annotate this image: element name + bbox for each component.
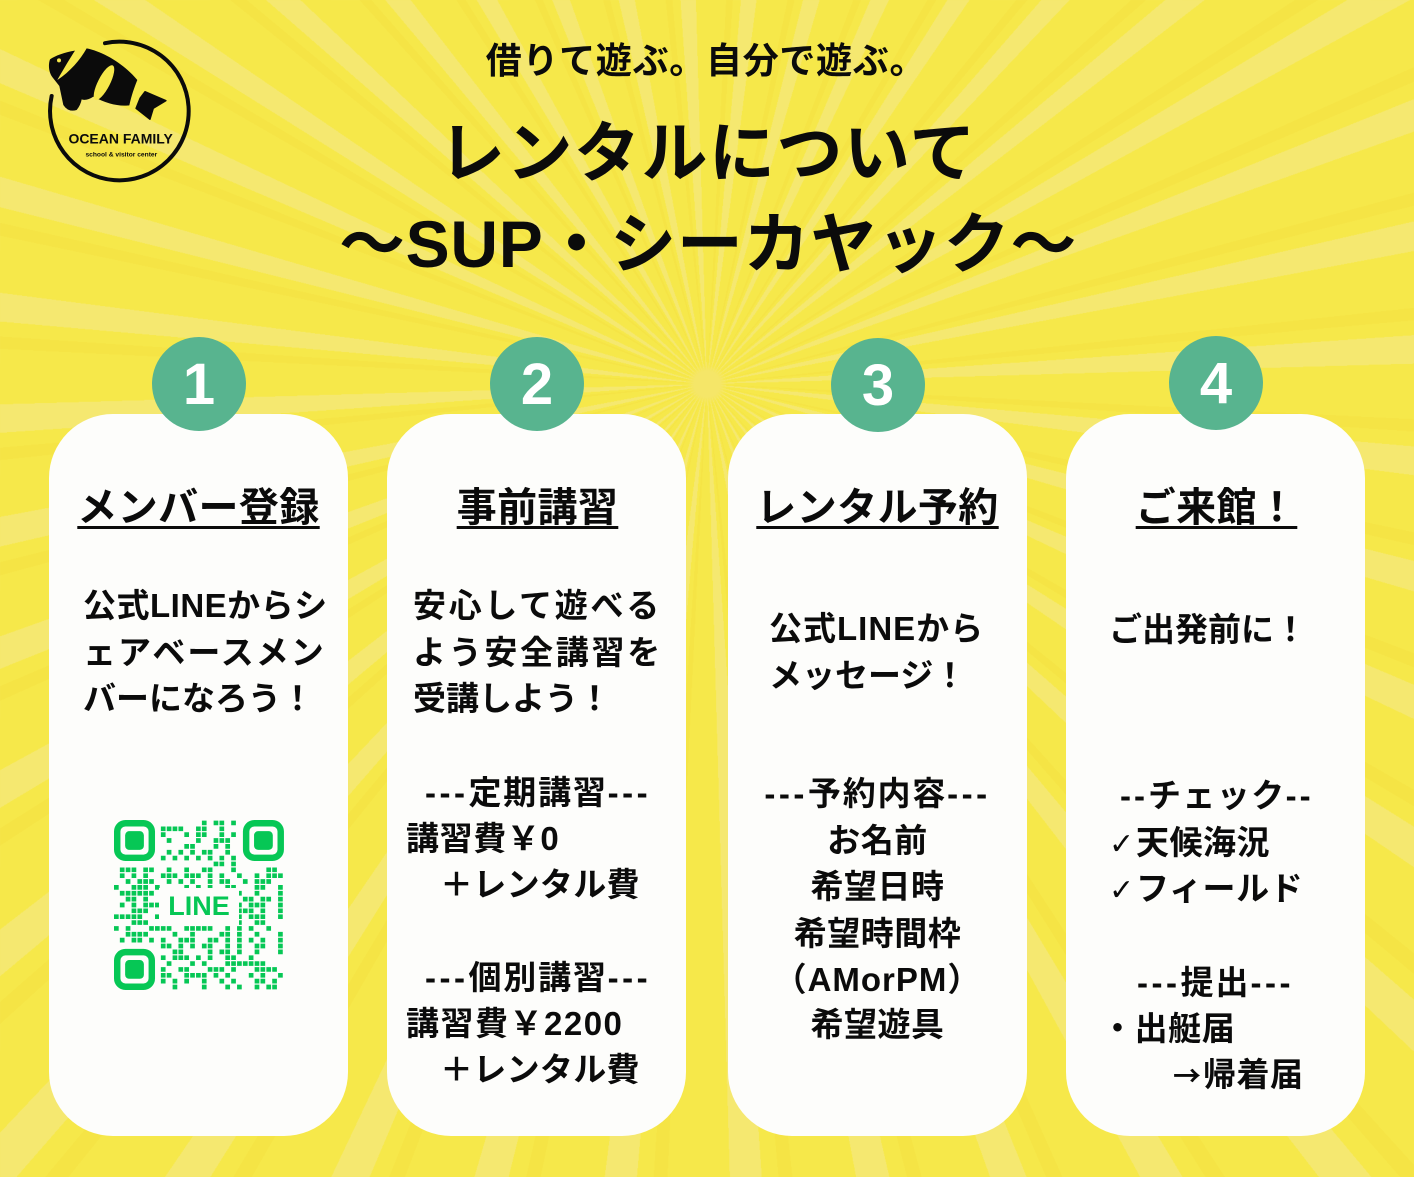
text block: step 1 description: 公式LINEからシ xyxy=(83,587,328,624)
text block: regular course fee: ＋レンタル費 xyxy=(440,866,640,903)
text block: step 2 description: よう安全講習を xyxy=(413,634,663,671)
text block: step 3 description: 公式LINEから xyxy=(769,610,984,647)
text block: regular course fee xyxy=(406,774,651,903)
text block: checklist: ✓ xyxy=(1109,873,1134,908)
text block: individual course fee xyxy=(406,959,651,1088)
text block: step 2 description: 安心して遊べる xyxy=(413,587,662,624)
text block: reservation details: ---予約内容--- xyxy=(764,775,991,812)
main title line 1: レンタルについて xyxy=(439,116,977,190)
panel: step 1 member registration xyxy=(49,414,348,1136)
text block: checklist xyxy=(1109,777,1314,908)
text block: individual course fee: ＋レンタル費 xyxy=(440,1051,640,1088)
text block: forms to submit: →帰着届 xyxy=(1173,1055,1304,1095)
subtitle: 借りて遊ぶ。自分で遊ぶ。 xyxy=(486,40,926,81)
text block: individual course fee: 講習費￥2200 xyxy=(406,1005,623,1042)
panel: step 4 visit xyxy=(1066,414,1365,1136)
icon: number 1 badge xyxy=(152,337,246,431)
icon: number 3 badge: 3 xyxy=(862,353,894,418)
text block: checklist: 天候海況 xyxy=(1136,824,1270,861)
heading: step 3: レンタル予約 xyxy=(756,486,999,530)
icon: number 4 badge: 4 xyxy=(1200,351,1232,416)
text block: reservation details: 希望遊具 xyxy=(810,1006,944,1043)
text block: step 1 description xyxy=(83,587,328,717)
heading: step 4: ご来館！ xyxy=(1136,486,1297,530)
text block: forms to submit xyxy=(1101,964,1304,1095)
panel: step 3 rental reservation xyxy=(728,414,1027,1136)
icon: number 3 badge xyxy=(831,338,925,432)
heading: step 1: メンバー登録 xyxy=(77,486,320,530)
icon: number 2 badge xyxy=(490,337,584,431)
text block: checklist: --チェック-- xyxy=(1120,777,1314,814)
text block: step 1 description: バーになろう！ xyxy=(83,680,314,717)
text block: step 3 description xyxy=(769,610,984,694)
QR code: official LINE: LINE xyxy=(168,891,230,921)
heading: step 2: 事前講習 xyxy=(457,486,618,530)
text block: reservation details: （AMorPM） xyxy=(774,961,981,998)
text block: individual course fee: ---個別講習--- xyxy=(425,959,651,996)
text block: step 1 description: ェアベースメン xyxy=(83,634,326,671)
text block: checklist: フィールド xyxy=(1136,870,1303,907)
icon: number 4 badge xyxy=(1169,336,1263,430)
text block: reservation details: 希望日時 xyxy=(810,868,944,905)
panel: step 2 pre-course xyxy=(387,414,686,1136)
text block: step 3 description: メッセージ！ xyxy=(769,657,966,694)
text block: reservation details xyxy=(764,775,991,1043)
text block: reservation details: お名前 xyxy=(827,822,928,859)
text block: step 2 description: 受講しよう！ xyxy=(413,680,611,717)
logo: Ocean Family clownfish badge: OCEAN FAMILY xyxy=(68,130,174,146)
text block: step 4 description: ご出発前に！ xyxy=(1109,611,1307,648)
text block: reservation details: 希望時間枠 xyxy=(794,915,961,952)
QR code: official LINE xyxy=(114,820,284,990)
text block: regular course fee: 講習費￥0 xyxy=(406,820,559,857)
text block: regular course fee: ---定期講習--- xyxy=(425,774,651,811)
main title line 2: ～SUP・シーカヤック～ xyxy=(339,207,1077,281)
icon: number 1 badge: 1 xyxy=(183,352,215,417)
text block: forms to submit: ---提出--- xyxy=(1137,964,1294,1001)
logo: Ocean Family clownfish badge: school & visitor center xyxy=(85,151,158,158)
text block: step 2 description xyxy=(413,587,663,717)
text block: forms to submit: ・出艇届 xyxy=(1101,1010,1235,1047)
logo: Ocean Family clownfish badge xyxy=(48,40,191,182)
icon: number 2 badge: 2 xyxy=(521,352,553,417)
text block: checklist: ✓ xyxy=(1109,827,1134,862)
